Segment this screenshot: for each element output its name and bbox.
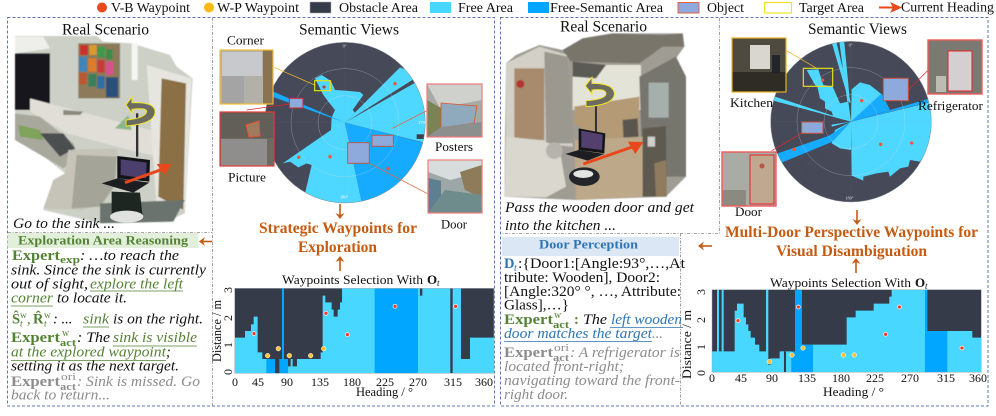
title: multi-door waypoints: Visual Disambiguation: [776, 243, 927, 260]
icon: rotation arrow right: [585, 77, 614, 107]
angle labels: 270°: [418, 120, 427, 125]
text block: exploration reasoning: sink. Since the sink is currently: [11, 262, 207, 278]
x axis ticks right: 270: [901, 371, 919, 385]
x axis ticks left: 315: [444, 375, 462, 389]
polar chart: left semantic view: [246, 42, 428, 204]
free-semantic area wedges right: [776, 93, 935, 163]
text block: door perception reasoning: D: [504, 256, 514, 272]
panel frame: right example: [500, 18, 988, 406]
x axis ticks left: 135: [311, 375, 329, 389]
chart title right: O: [915, 275, 925, 290]
y axis ticks left: 2: [221, 315, 235, 321]
connector lines: [247, 67, 430, 195]
x axis ticks left: 270: [409, 375, 427, 389]
text block: exploration reasoning: setting it as the next target.: [11, 358, 179, 374]
x axis ticks right: 315: [937, 371, 955, 385]
title: multi-door waypoints: Multi-Door Perspective Waypoints for: [725, 224, 978, 241]
x axis ticks left: 90: [281, 375, 293, 389]
x axis ticks right: 180: [832, 371, 850, 385]
angle labels: 0°: [343, 43, 347, 48]
image: kitchen: [732, 38, 786, 92]
legend: target area: Target Area: [799, 0, 864, 15]
text block: exploration reasoning: act: [60, 338, 77, 349]
object: picture box: [289, 98, 303, 108]
object: door box right: [802, 122, 823, 133]
text block: exploration reasoning: ori: [61, 372, 76, 383]
text block: door perception reasoning: :{Door1:[Angle:93°,…,At: [518, 256, 685, 272]
image: door: [428, 160, 482, 213]
header: door perception: Door Perception: [539, 236, 639, 252]
chart title left: O: [427, 272, 437, 287]
label: kitchen: Kitchen: [730, 95, 774, 110]
text block: door perception reasoning: door matches the target: [504, 326, 653, 342]
y axis ticks left: [221, 287, 235, 375]
object: door box: [348, 143, 369, 163]
caption: go to the sink: Go to the sink ...: [13, 216, 115, 232]
arrow: current heading right: [583, 142, 643, 164]
image: real scenario left: [15, 36, 193, 223]
label: corner: Corner: [227, 32, 265, 48]
yellow waypoints right: [767, 346, 857, 364]
text block: exploration reasoning: Expert: [12, 248, 60, 264]
arrow: current heading: [125, 164, 172, 183]
text block: exploration reasoning: act: [60, 382, 77, 393]
label: door: Door: [441, 216, 468, 232]
arrow: polar to waypoints title: [336, 204, 344, 219]
text block: exploration reasoning: ,: [27, 312, 31, 328]
text block: door perception reasoning: right door.: [504, 387, 568, 403]
text block: exploration reasoning: w: [20, 311, 27, 321]
text block: exploration reasoning: t: [20, 320, 23, 330]
x axis ticks right: 90: [766, 371, 778, 385]
arrow: chart to waypoints title: [336, 256, 344, 271]
text block: exploration reasoning: Expert: [11, 374, 60, 390]
y axis ticks right: 0: [694, 370, 708, 376]
y axis ticks right: 1: [694, 344, 708, 350]
grid chart: right waypoint selection: [679, 289, 987, 399]
waypoints: [297, 82, 397, 170]
arrow: to door perception: [698, 242, 712, 250]
text block: exploration reasoning: [11, 248, 207, 404]
free area wedges: [282, 68, 426, 203]
angle labels right: 0°: [849, 43, 853, 48]
text block: exploration reasoning: at the explored waypoint: [11, 344, 167, 360]
red waypoints: [252, 304, 458, 337]
image: refrigerator: [928, 40, 982, 94]
text block: exploration reasoning: explore the left: [90, 276, 184, 292]
image: door right: [722, 152, 776, 206]
text block: exploration reasoning: sink: [83, 312, 110, 328]
text block: exploration reasoning: to locate it.: [57, 290, 127, 306]
object: posters box: [372, 135, 393, 146]
chart title right: Waypoints Selection With: [770, 275, 912, 290]
y axis ticks left: 1: [221, 342, 235, 348]
polar chart: right semantic view: [771, 39, 937, 202]
x axis title right: Heading / °: [823, 384, 884, 399]
angle labels: 180°: [340, 195, 348, 200]
free area wedges right: [773, 39, 937, 181]
text block: exploration reasoning: is on the right.: [113, 312, 203, 328]
text block: exploration reasoning: Expert: [11, 330, 60, 346]
icon: rotation arrow: [126, 97, 155, 126]
robot with laptop: [102, 113, 150, 223]
x axis ticks left: 45: [252, 375, 264, 389]
x axis ticks left: 225: [376, 375, 394, 389]
x axis ticks left: [232, 375, 493, 389]
text block: door perception reasoning: The: [583, 312, 608, 328]
text block: door perception reasoning: navigating toward the front-: [504, 373, 680, 389]
text block: door perception reasoning: Glass],…}: [504, 298, 569, 314]
legend: free area: Free Area: [458, 0, 513, 15]
legend: [97, 0, 994, 15]
text block: exploration reasoning: sink is visible: [113, 330, 198, 346]
x axis ticks right: 360: [969, 371, 987, 385]
legend: object: Object: [707, 0, 744, 15]
angle labels right: [845, 43, 854, 200]
chart title left: Waypoints Selection With: [282, 272, 424, 287]
y axis ticks left: 0: [221, 369, 235, 375]
image: corner: [220, 50, 273, 104]
heading: real scenario left: Real Scenario: [62, 22, 149, 38]
red waypoints right: [736, 305, 964, 350]
y axis title left: Distance / m: [209, 300, 224, 362]
text block: door perception reasoning: ...: [652, 326, 663, 342]
text block: exploration reasoning: R̂: [33, 310, 44, 328]
chart title left: t: [437, 278, 440, 288]
angle labels: [340, 43, 427, 200]
image: real scenario right: [504, 33, 686, 200]
x axis ticks left: 360: [475, 375, 493, 389]
x axis ticks right: 135: [798, 371, 816, 385]
text block: exploration reasoning: w: [62, 328, 70, 339]
target area box: [315, 81, 330, 91]
legend: target area: [764, 0, 864, 15]
caption: pass the wooden door: [504, 200, 695, 234]
heading: semantic views right: Semantic Views: [808, 21, 907, 38]
label: posters: Posters: [435, 139, 473, 154]
text block: exploration reasoning: out of sight,: [11, 276, 88, 292]
text block: door perception reasoning: Expert: [504, 345, 553, 361]
x axis ticks right: 225: [866, 371, 884, 385]
text block: exploration reasoning: exp: [60, 255, 80, 266]
free-semantic area wedges: [274, 92, 423, 202]
x axis ticks left: 0: [232, 375, 238, 389]
text block: exploration reasoning: : ...: [53, 312, 72, 328]
caption: pass the wooden door: into the kitchen ...: [505, 218, 616, 234]
title: strategic waypoints: Exploration: [298, 239, 377, 256]
label: door right: Door: [735, 204, 763, 219]
text block: exploration reasoning: back to return...: [11, 388, 110, 404]
legend: object: [678, 0, 744, 15]
legend: free-semantic area: Free-Semantic Area: [550, 0, 663, 15]
legend: obstacle area: Obstacle Area: [339, 0, 418, 15]
y axis ticks right: 2: [694, 317, 708, 323]
header: door perception: [502, 236, 679, 256]
legend: V-B waypoint: V-B Waypoint: [111, 0, 190, 15]
waypoints right: [792, 78, 913, 151]
x axis ticks right: [709, 371, 987, 385]
title: multi-door waypoints: [725, 224, 978, 260]
header: exploration area reasoning: Exploration Area Reasoning: [18, 232, 189, 248]
y axis ticks right: [694, 289, 708, 376]
arrow: to reasoning: [199, 237, 212, 246]
x axis ticks right: 45: [735, 371, 747, 385]
text block: door perception reasoning: [Angle:320° °, …, Attribute:: [504, 284, 681, 300]
legend: W-P waypoint: W-P Waypoint: [217, 0, 299, 15]
text block: door perception reasoning: [504, 256, 685, 403]
arrow: polar to title right: [852, 210, 862, 225]
text block: exploration reasoning: corner: [11, 290, 53, 306]
legend: free area: [430, 0, 513, 15]
text block: door perception reasoning: tribute: Wooden], Door2:: [504, 270, 660, 286]
text block: door perception reasoning: act: [553, 353, 570, 364]
text block: door perception reasoning: located front-right;: [504, 359, 624, 375]
x axis ticks left: 180: [343, 375, 361, 389]
target area box right: [803, 68, 833, 86]
arrow: chart to title right: [852, 258, 860, 273]
text block: door perception reasoning: left wooden: [611, 312, 682, 328]
chart title right: t: [925, 281, 928, 291]
text block: exploration reasoning: : …to reach the: [80, 248, 180, 264]
text block: door perception reasoning: w: [554, 310, 562, 321]
heading: semantic views left: Semantic Views: [299, 22, 399, 38]
label: refrigerator: Refrigerator: [918, 98, 984, 113]
yellow waypoints: [265, 346, 326, 358]
x axis title left: Heading / °: [356, 384, 413, 399]
text block: exploration reasoning: ;: [166, 344, 171, 360]
grid chart: left waypoint selection: [209, 287, 494, 399]
heading: real scenario right: Real Scenario: [560, 18, 647, 36]
caption: pass the wooden door: Pass the wooden door and get: [504, 200, 695, 216]
text block: door perception reasoning: :: [574, 312, 579, 328]
text block: door perception reasoning: : A refrigerator is: [570, 345, 680, 361]
x axis ticks right: 0: [709, 371, 715, 385]
panel frame: left example: [8, 18, 494, 406]
text block: exploration reasoning: t: [44, 320, 47, 330]
object: refrigerator box: [883, 78, 908, 101]
y axis ticks left: 3: [221, 287, 235, 293]
title: strategic waypoints: [259, 220, 417, 256]
image: posters: [427, 84, 482, 137]
text block: exploration reasoning: : Sink is missed. Go: [77, 374, 200, 390]
text block: door perception reasoning: t: [514, 263, 517, 274]
text block: exploration reasoning: w: [44, 311, 51, 321]
text block: exploration reasoning: : The: [77, 330, 111, 346]
y axis title right: Distance / m: [679, 310, 694, 379]
text block: exploration reasoning: Ŝ: [12, 310, 20, 328]
text block: door perception reasoning: act: [553, 320, 570, 331]
text block: door perception reasoning: Expert: [504, 312, 553, 328]
text block: door perception reasoning: ori: [554, 343, 569, 354]
image: picture: [220, 112, 274, 166]
robot with laptop right: [565, 100, 605, 186]
connector lines right: [772, 51, 928, 151]
title: strategic waypoints: Strategic Waypoints for: [259, 220, 417, 237]
y axis ticks right: 3: [694, 289, 708, 295]
label: picture: Picture: [228, 170, 266, 184]
angle labels right: 180°: [845, 195, 854, 200]
